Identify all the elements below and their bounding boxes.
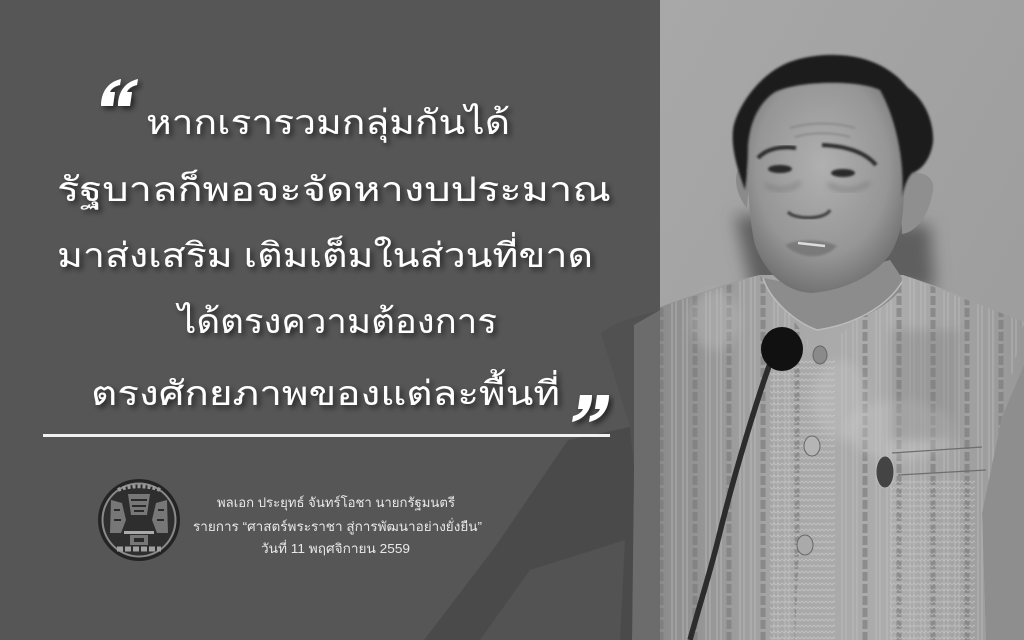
quote text: ตรงศักยภาพของแต่ละพื้นที่ (91, 369, 560, 413)
quote text: ได้ตรงความต้องการ (175, 302, 497, 341)
opening quotation mark (101, 79, 138, 106)
under-eye shading (765, 182, 870, 190)
head shadow on wall (735, 215, 935, 290)
left panel: dark background (0, 0, 660, 640)
eyebrows (758, 147, 796, 158)
attribution text: วันที่ 11 พฤศจิกายน 2559 (261, 540, 410, 556)
photo: portrait of the speaker (660, 55, 1024, 640)
right ear (902, 173, 933, 234)
face (747, 81, 904, 293)
emblem: government seal (98, 479, 180, 561)
quote text (57, 103, 611, 413)
quote text: มาส่งเสริม เติมเต็มในส่วนที่ขาด (57, 232, 593, 275)
pin badge (876, 456, 894, 488)
eyes (768, 165, 792, 173)
microphone (690, 327, 803, 640)
hair (733, 55, 933, 197)
quote text: รัฐบาลก็พอจะจัดหางบประมาณ (57, 169, 611, 210)
quote text: หากเรารวมกลุ่มกันได้ (146, 103, 510, 143)
attribution text: พลเอก ประยุทธ์ จันทร์โอชา นายกรัฐมนตรี (217, 495, 455, 511)
photo panel: background wall (660, 0, 1024, 640)
divider rule (43, 434, 610, 437)
vest (660, 275, 1024, 640)
buttons (813, 346, 827, 364)
nose (788, 210, 830, 218)
collar (763, 260, 902, 330)
attribution text (193, 495, 482, 556)
mouth (785, 241, 837, 256)
forehead wrinkles (790, 124, 855, 137)
left arm seen through the panel (424, 310, 660, 640)
attribution text: รายการ “ศาสตร์พระราชา สู่การพัฒนาอย่างยั่งยืน” (193, 518, 482, 535)
left ear (736, 170, 750, 208)
closing quotation mark (572, 395, 609, 422)
right sleeve (982, 365, 1024, 640)
